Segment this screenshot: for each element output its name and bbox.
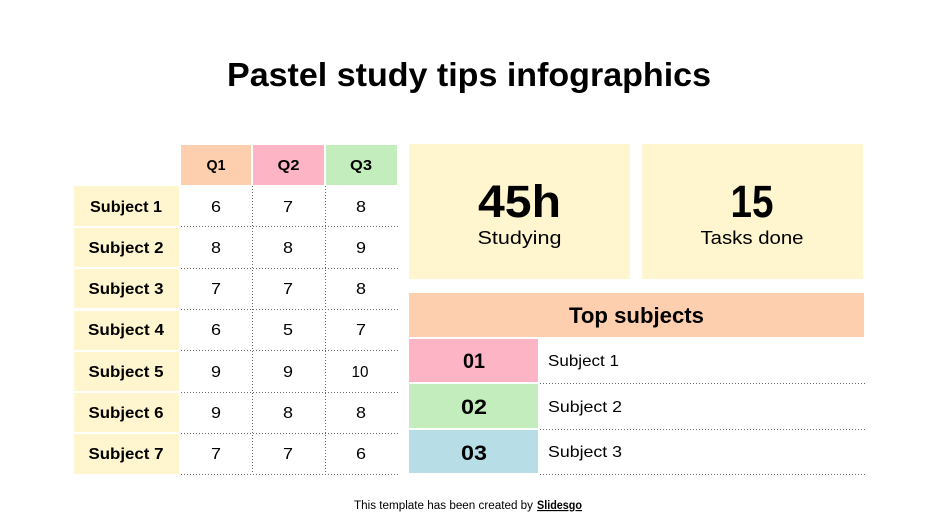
row: Subject 1: Subject 1 xyxy=(90,199,162,216)
row: Subject 4 xyxy=(74,311,366,350)
row: Subject 1: 6 xyxy=(211,199,221,216)
row: Subject 2 xyxy=(74,228,366,267)
footer credit: This template has been created by xyxy=(354,500,533,512)
rank 01 xyxy=(409,339,619,382)
panel: top subjects xyxy=(409,293,865,474)
row: Subject 4: 5 xyxy=(283,322,293,339)
rank 03: Subject 3 xyxy=(548,444,622,461)
panel: quarterly scores table xyxy=(74,145,398,474)
row: Subject 3 xyxy=(74,269,366,308)
row: Subject 3: 7 xyxy=(283,281,293,298)
row: Subject 7: Subject 7 xyxy=(88,446,164,463)
row: Subject 4: Subject 4 xyxy=(88,322,164,339)
row: Subject 6: 8 xyxy=(283,405,293,422)
rank 03: 03 xyxy=(461,441,487,465)
row: Subject 7: 6 xyxy=(356,446,366,463)
row: Subject 3: 7 xyxy=(211,281,221,298)
row: Subject 7 xyxy=(74,434,366,474)
row: Subject 7: 7 xyxy=(283,446,293,463)
row: Subject 1: 7 xyxy=(283,199,293,216)
title: Pastel study tips infographics xyxy=(227,56,711,93)
row: Subject 6 xyxy=(74,393,366,432)
row: Subject 2: 8 xyxy=(211,240,221,257)
header: Q3 xyxy=(326,145,397,185)
heading: Top subjects xyxy=(409,293,864,337)
stat label: Tasks done: Tasks done xyxy=(700,228,804,248)
rank 02: Subject 2 xyxy=(548,399,622,416)
row: Subject 4: 7 xyxy=(356,322,366,339)
row: Subject 2: 9 xyxy=(356,240,366,257)
header: Q3: Q3 xyxy=(350,157,372,174)
row: Subject 6: Subject 6 xyxy=(88,405,164,422)
row: Subject 1: 8 xyxy=(356,199,366,216)
row: Subject 4: 6 xyxy=(211,322,221,339)
row: Subject 3: 8 xyxy=(356,281,366,298)
rank 03 xyxy=(409,430,622,473)
rank 01: Subject 1 xyxy=(548,353,619,370)
stat value: 45h: 45h xyxy=(478,176,561,227)
header: Q2 xyxy=(253,145,324,185)
row: Subject 5: 9 xyxy=(283,364,293,381)
header: Q1: Q1 xyxy=(206,157,226,174)
row: Subject 5: Subject 5 xyxy=(88,364,164,381)
row: Subject 2: Subject 2 xyxy=(88,240,164,257)
row: Subject 6: 9 xyxy=(211,405,221,422)
rank 01: 01 xyxy=(463,349,485,373)
footer credit: Slidesgo xyxy=(537,500,582,512)
rank 02: 02 xyxy=(461,395,487,419)
row: Subject 3: Subject 3 xyxy=(88,281,164,298)
panel: studying stat xyxy=(409,144,630,279)
rank 02 xyxy=(409,384,622,428)
stat label: Studying: Studying xyxy=(478,228,562,248)
stat value: 15: 15 xyxy=(730,176,774,227)
header: Q2: Q2 xyxy=(278,157,300,174)
row: Subject 7: 7 xyxy=(211,446,221,463)
row: Subject 6: 8 xyxy=(356,405,366,422)
row: Subject 5 xyxy=(74,352,369,391)
row: Subject 5: 10 xyxy=(352,364,369,381)
panel: tasks done stat xyxy=(642,144,863,279)
row: Subject 5: 9 xyxy=(211,364,221,381)
heading: Top subjects: Top subjects xyxy=(569,303,704,328)
row: Subject 1 xyxy=(74,186,366,226)
row: Subject 2: 8 xyxy=(283,240,293,257)
header: Q1 xyxy=(181,145,251,185)
